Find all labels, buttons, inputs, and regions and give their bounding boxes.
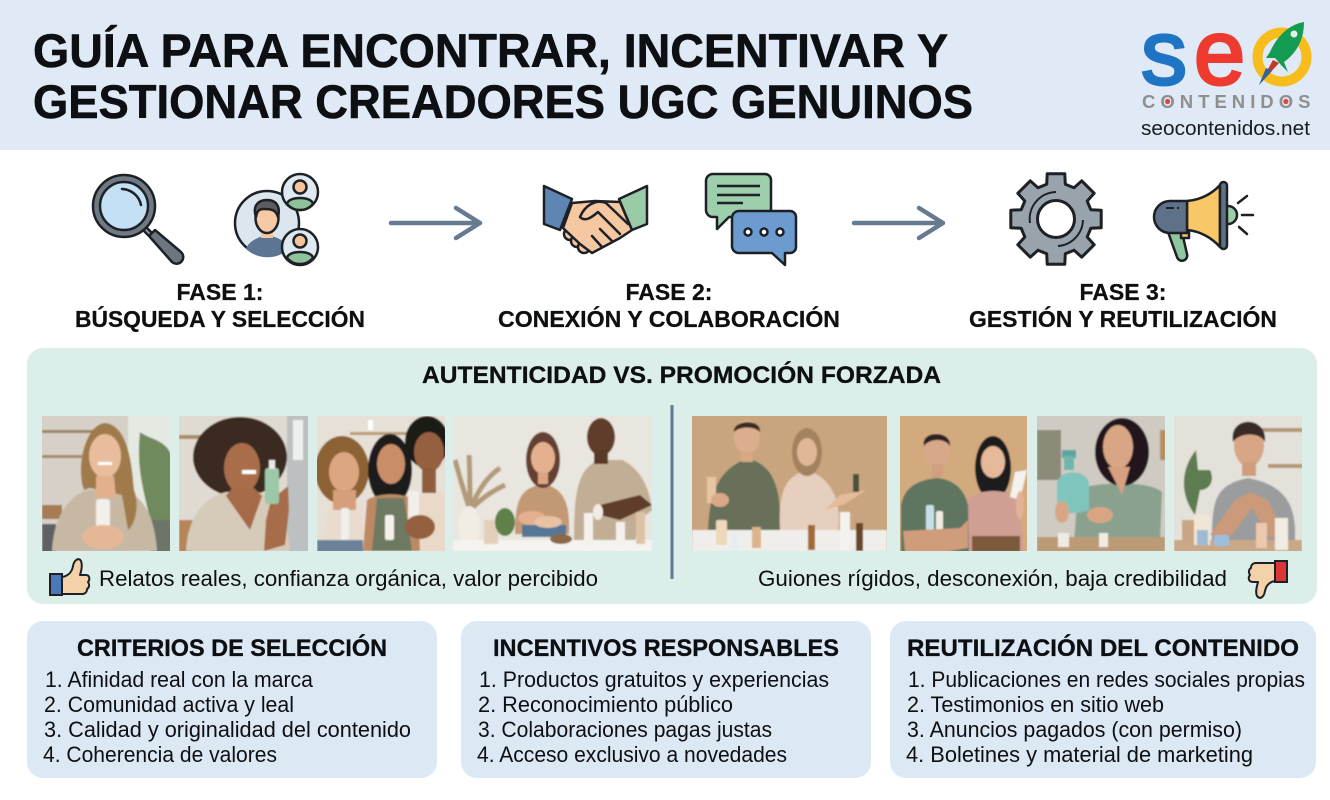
card heading: CRITERIOS DE SELECCIÓN [77, 634, 387, 662]
list: 4. Boletines y material de marketing [906, 742, 1253, 767]
photo: three friends with products [317, 416, 445, 551]
phase 2 [498, 174, 840, 332]
photo: woman with white bottle [42, 416, 170, 551]
list [477, 667, 829, 767]
photo: woman with green bottle [179, 416, 308, 551]
icon: chat bubbles [706, 174, 796, 265]
phase 1 [75, 174, 365, 332]
panel: autenticidad vs promoción forzada [27, 348, 1317, 604]
logo: SEO Contenidos: seocontenidos.net [1141, 117, 1310, 140]
logo: SEO Contenidos: CONTENIDOS [1142, 91, 1310, 112]
panel: incentivos responsables [461, 621, 871, 778]
panel heading: AUTENTICIDAD VS. PROMOCIÓN FORZADA [422, 361, 941, 389]
icon: gear [1011, 174, 1101, 264]
phase 3 label: FASE 3: [1080, 279, 1166, 305]
logo: SEO Contenidos: e [1194, 2, 1245, 104]
phase 3 [969, 174, 1277, 332]
logo: SEO Contenidos [1141, 2, 1310, 140]
phase 1 label [75, 279, 365, 332]
divider [670, 405, 674, 579]
icon: handshake [544, 186, 647, 253]
list: 1. Productos gratuitos y experiencias [479, 667, 829, 692]
list [906, 667, 1305, 767]
photo: couple at table [453, 416, 652, 551]
header band [0, 0, 1330, 150]
caption: forced: Guiones rígidos, desconexión, baja credibilidad [758, 566, 1227, 591]
list: 4. Acceso exclusivo a novedades [477, 742, 787, 767]
caption: authentic: Relatos reales, confianza orgánica, valor percibido [99, 566, 598, 591]
photo: serious man with products [1174, 416, 1302, 551]
phase 1 label: BÚSQUEDA Y SELECCIÓN [75, 305, 365, 332]
phase 1 label: FASE 1: [177, 279, 263, 305]
photo: uncomfortable couple [900, 416, 1027, 551]
list: 1. Publicaciones en redes sociales propias [908, 667, 1305, 692]
list: 2. Testimonios en sitio web [907, 692, 1164, 717]
icon: magnifying glass [93, 175, 183, 264]
icon: thumbs up [50, 559, 89, 595]
phase 2 label [498, 279, 840, 332]
list: 3. Anuncios pagados (con permiso) [907, 717, 1242, 742]
list: 1. Afinidad real con la marca [45, 667, 314, 692]
card heading: INCENTIVOS RESPONSABLES [493, 635, 839, 662]
title [33, 24, 973, 128]
list: 2. Comunidad activa y leal [44, 692, 294, 717]
list: 3. Colaboraciones pagas justas [478, 717, 772, 742]
list: 2. Reconocimiento público [478, 692, 733, 717]
phase 3 label: GESTIÓN Y REUTILIZACIÓN [969, 305, 1277, 332]
list: 4. Coherencia de valores [43, 742, 277, 767]
phase 2 label: FASE 2: [626, 279, 712, 305]
icon: thumbs down [1249, 561, 1287, 598]
card heading: REUTILIZACIÓN DEL CONTENIDO [907, 634, 1299, 662]
photo: posed couple on tan background [692, 416, 887, 551]
title: GUÍA PARA ENCONTRAR, INCENTIVAR Y [33, 24, 948, 77]
phase 2 label: CONEXIÓN Y COLABORACIÓN [498, 305, 840, 332]
arrow: phase 2 to 3 [854, 208, 943, 238]
logo: SEO Contenidos: s [1141, 2, 1187, 104]
list [43, 667, 411, 767]
arrow: phase 1 to 2 [391, 208, 480, 238]
panel: criterios de selección [27, 621, 437, 778]
list: 3. Calidad y originalidad del contenido [44, 717, 411, 742]
title: GESTIONAR CREADORES UGC GENUINOS [33, 75, 973, 128]
phase 3 label [969, 279, 1277, 332]
icon: creators network [235, 174, 318, 265]
panel: reutilización del contenido [890, 621, 1316, 778]
icon: megaphone [1154, 182, 1253, 261]
photo: skeptical woman with aqua bottle [1037, 416, 1165, 551]
